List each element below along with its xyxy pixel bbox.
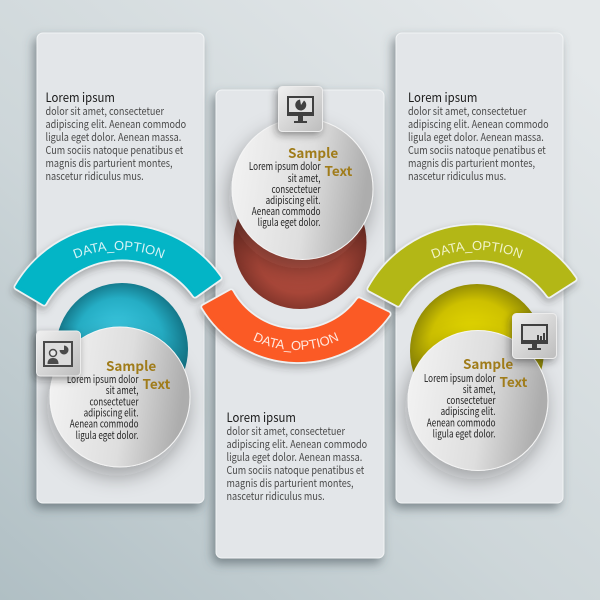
panel text: left [46,88,186,183]
panel text: left: ligula eget dolor. Aenean massa. [46,128,181,144]
circle recess: teal [56,283,188,415]
panel text: middle: dolor sit amet, consectetuer [226,422,345,438]
panel text: left: Lorem ipsum [46,88,115,106]
panel text: left: dolor sit amet, consectetuer [46,102,164,118]
icon tile: monitor bars [512,314,556,358]
disc text: middle: consectetuer [271,181,321,196]
disc: left [50,327,190,467]
panel text: left: nascetur ridiculus mus. [46,167,144,183]
panel: middle [216,90,384,558]
disc heading: left [106,355,171,393]
disc: middle [232,118,373,260]
disc: right [408,330,548,470]
panel text: middle: magnis dis parturient montes, [226,474,354,490]
disc text: left [67,371,139,442]
disc text: middle [249,158,321,229]
panel text: right: magnis dis parturient montes, [408,154,535,170]
disc text: right: sit amet, [463,381,496,396]
disc text: middle: sit amet, [288,170,321,185]
panel text: middle: ligula eget dolor. Aenean massa. [226,448,362,464]
disc text: middle: ligula eget dolor. [258,214,320,229]
panel text: right: dolor sit amet, consectetuer [408,102,527,118]
disc text: left: Aenean commodo [70,415,139,431]
panel text: right: Lorem ipsum [408,88,477,106]
arc label: olive: DATA_OPTION [431,240,523,258]
arc band: teal [10,223,225,314]
panel text: right: adipiscing elit. Aenean commodo [408,115,549,131]
disc text: middle: Lorem ipsum dolor [249,158,321,173]
arc band: orange [196,288,393,372]
arc label: teal: DATA_OPTION [73,240,165,258]
disc heading: middle: Sample [288,142,338,162]
disc text: right: ligula eget dolor. [433,425,496,441]
disc text: left: sit amet, [106,382,139,397]
panel: left [37,33,204,503]
panel text: middle: adipiscing elit. Aenean commodo [226,435,367,451]
panel text: right: nascetur ridiculus mus. [408,167,506,183]
panel text: left: adipiscing elit. Aenean commodo [46,115,186,131]
panel text: middle: nascetur ridiculus mus. [226,487,325,503]
disc heading: right: Sample [463,353,513,373]
disc text: right: Lorem ipsum dolor [424,370,496,385]
disc text: left: ligula eget dolor. [76,427,138,442]
disc text: left: adipiscing elit. [84,404,138,420]
disc text: middle: adipiscing elit. [266,192,320,207]
icon tile: monitor pie [278,86,322,132]
disc text: right: consectetuer [446,392,496,407]
panel text: middle: Lorem ipsum [226,408,296,426]
panel text: right: Cum sociis natoque penatibus et [408,141,546,157]
disc heading: left: Sample [106,355,156,375]
arc band: olive [362,222,580,316]
disc heading: right [463,353,528,391]
disc text: right [424,370,496,441]
panel text: middle: Cum sociis natoque penatibus et [226,461,364,477]
panel text: right [408,88,549,183]
disc heading: middle: Text [324,160,353,180]
icon tile: presenter [36,331,80,376]
disc text: left: Lorem ipsum dolor [67,371,139,386]
disc text: right: Aenean commodo [427,414,496,430]
disc text: left: consectetuer [89,393,139,409]
circle recess: yellow [410,284,544,418]
disc heading: middle [288,142,353,180]
disc heading: right: Text [500,371,528,391]
panel: right [396,33,563,503]
panel text: left: magnis dis parturient montes, [46,154,173,170]
panel text: right: ligula eget dolor. Aenean massa. [408,128,544,144]
arc label: orange: DATA_OPTION [254,332,338,352]
disc text: middle: Aenean commodo [252,203,321,218]
panel text: left: Cum sociis natoque penatibus et [46,141,183,157]
panel text: middle [226,408,367,503]
disc text: right: adipiscing elit. [441,403,496,418]
circle recess: red [234,176,366,309]
disc heading: left: Text [142,373,171,393]
